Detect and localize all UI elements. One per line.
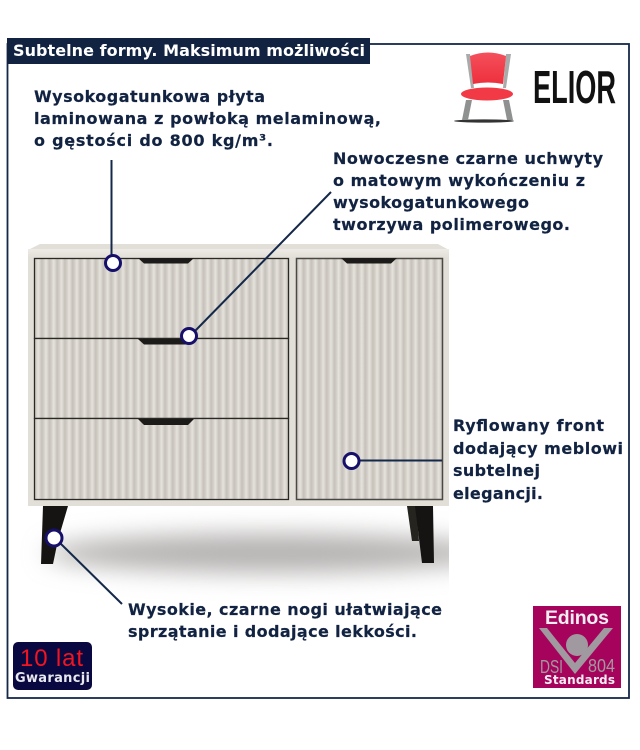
callout text: legs (128, 600, 442, 641)
callout text: fluted front: Ryflowany front (453, 416, 604, 435)
callout text: board material: laminowana z powłoką melaminową, (34, 109, 381, 128)
title: Subtelne formy. Maksimum możliwości (13, 41, 365, 60)
cabinet body (28, 244, 449, 506)
callout text: handles: o matowym wykończeniu z (333, 171, 585, 190)
marker: board (106, 256, 120, 270)
door (296, 258, 442, 500)
drawer 2 (34, 338, 288, 418)
sideboard illustration (28, 244, 495, 573)
callout text: legs: Wysokie, czarne nogi ułatwiające (128, 600, 442, 619)
marker: legs (46, 530, 62, 546)
callout text: board material (34, 87, 381, 150)
callout text: handles (333, 149, 604, 234)
callout text: fluted front: elegancji. (453, 484, 543, 503)
front legs (41, 506, 68, 564)
leader line: board (110, 160, 112, 256)
callout text: handles: tworzywa polimerowego. (333, 215, 570, 234)
callout text: fluted front: subtelnej (453, 461, 540, 480)
badge: 10 year warranty (13, 642, 92, 690)
logo: Elior (454, 52, 616, 123)
floor shadow (45, 533, 495, 573)
drawer 1 (34, 258, 288, 338)
badge: Edinos standards: Edinos (545, 607, 609, 629)
callout text: handles: wysokogatunkowego (333, 193, 529, 212)
badge: Edinos standards: Standards (544, 673, 615, 687)
callout text: legs: sprzątanie i dodające lekkości. (128, 622, 417, 641)
badge: Edinos standards: 804 (588, 656, 615, 676)
marker: handle (182, 328, 196, 344)
back legs (407, 506, 419, 541)
callout text: fluted front (453, 416, 623, 503)
callout text: fluted front: dodający meblowi (453, 439, 623, 458)
icon: red chair (454, 52, 514, 123)
marker: front (344, 454, 359, 468)
leader line: handle (195, 192, 331, 331)
drawer 3 (34, 418, 288, 500)
leader line: front (358, 460, 442, 462)
callout text: board material: Wysokogatunkowa płyta (34, 87, 265, 106)
handles (138, 258, 397, 425)
callout text: board material: o gęstości do 800 kg/m³. (34, 131, 273, 150)
badge: 10 year warranty: 10 lat (20, 645, 83, 672)
badge: Edinos standards: DSI (540, 657, 563, 677)
badge: 10 year warranty: Gwarancji (15, 671, 90, 686)
callout text: handles: Nowoczesne czarne uchwyty (333, 149, 604, 168)
leader line: legs (61, 544, 122, 604)
badge: Edinos standards (533, 606, 621, 688)
